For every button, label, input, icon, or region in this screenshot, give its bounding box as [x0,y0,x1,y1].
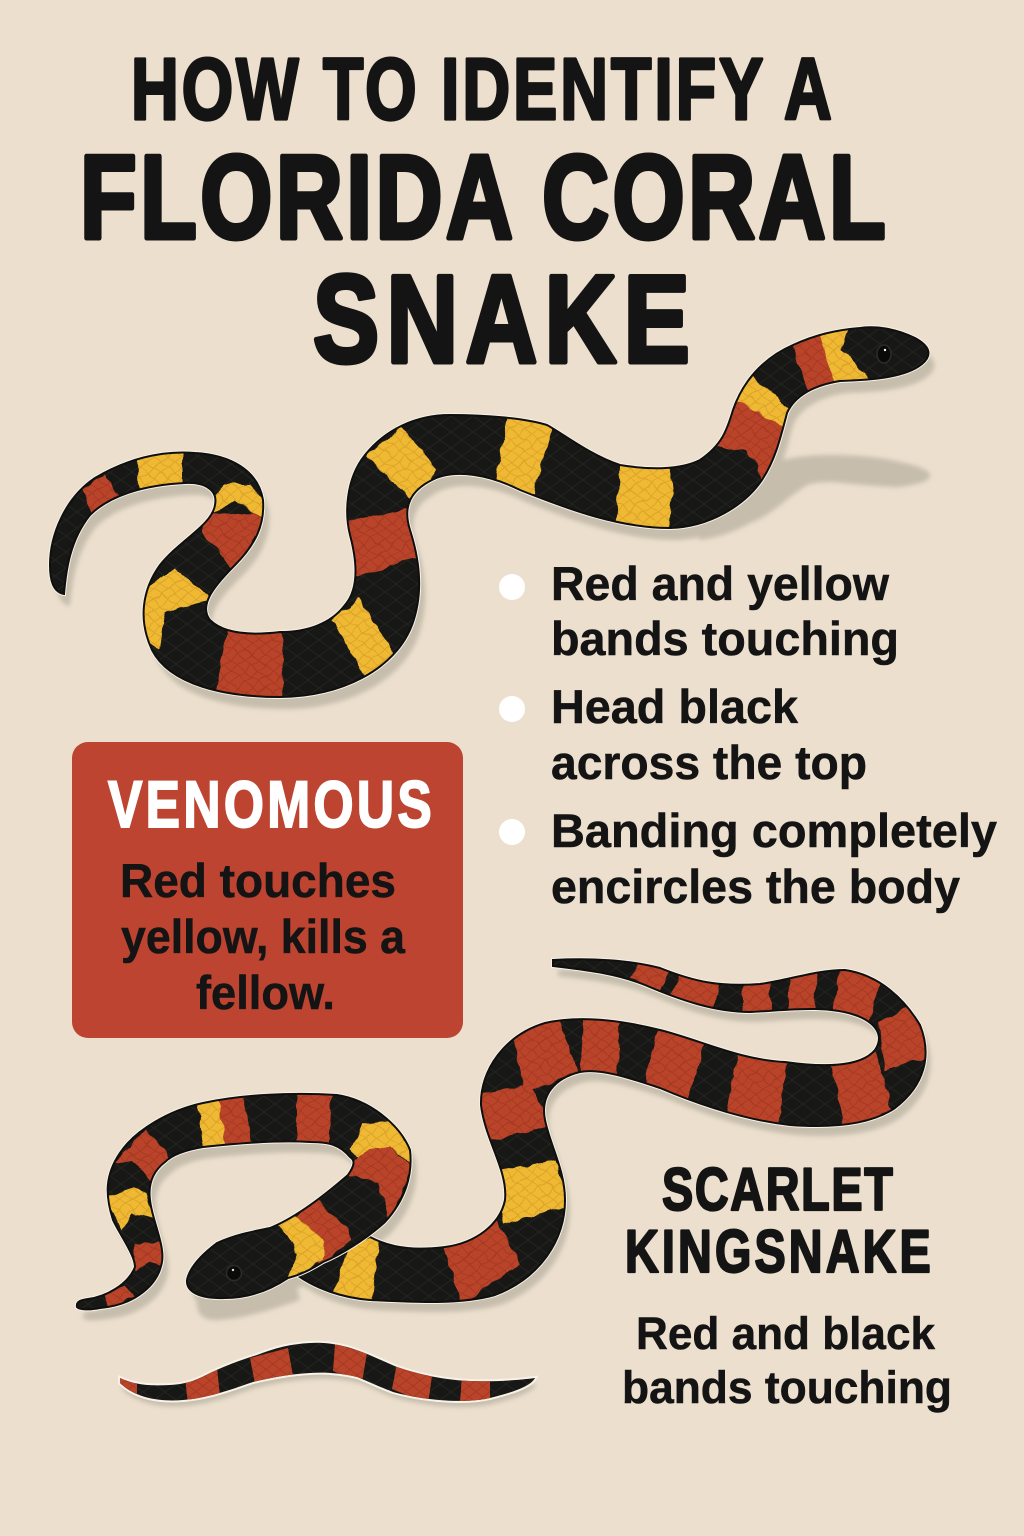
title: HOW TO IDENTIFY A [131,41,832,138]
bullet: head black: across the top [551,736,867,789]
small snake shadow [122,1349,537,1407]
title [80,41,886,389]
text: kingsnake rule: Red and black [636,1308,936,1359]
heading: scarlet kingsnake [625,1156,931,1285]
title: FLORIDA CORAL [80,130,886,264]
illustration: small kingsnake [120,1343,537,1407]
panel: venomous callout: VENOMOUS [108,767,432,841]
bullet: head black [499,680,867,789]
text: kingsnake rule [622,1308,952,1413]
panel: venomous callout: fellow. [196,966,335,1019]
heading: scarlet kingsnake: KINGSNAKE [625,1218,931,1285]
bullet: banding: Banding completely [551,804,997,857]
kingsnake shadow [83,969,931,1320]
panel: venomous callout: Red touches [120,854,396,907]
bullet: head black: Head black [551,680,799,733]
bullet: banding: encircles the body [551,860,960,913]
kingsnake eye [226,1266,242,1280]
kingsnake lower outline [290,959,926,1302]
kingsnake upper bands [105,1088,414,1310]
bullet: banding [499,804,997,913]
title: SNAKE [313,249,690,389]
kingsnake lower bands [333,955,934,1304]
kingsnake upper body [77,1094,411,1309]
heading: scarlet kingsnake: SCARLET [662,1156,893,1223]
small snake bands [120,1344,490,1404]
kingsnake lower body [290,959,926,1302]
panel: venomous callout [72,742,463,1038]
bullet: red and yellow [499,557,899,665]
bullet: red and yellow: bands touching [551,612,899,665]
kingsnake upper outline [77,1094,411,1309]
coral snake bands [82,328,870,702]
illustration: scarlet kingsnake [77,955,934,1320]
illustration: Florida coral snake [50,327,934,709]
small snake body [120,1343,535,1401]
coral snake body [50,327,928,697]
panel: venomous callout: yellow, kills a [121,910,406,963]
coral snake eye [877,345,891,363]
bullet: red and yellow: Red and yellow [551,557,889,610]
bullet list [499,557,997,913]
coral snake outline [50,327,928,697]
coral snake shadow [56,339,934,709]
text: kingsnake rule: bands touching [622,1362,952,1413]
